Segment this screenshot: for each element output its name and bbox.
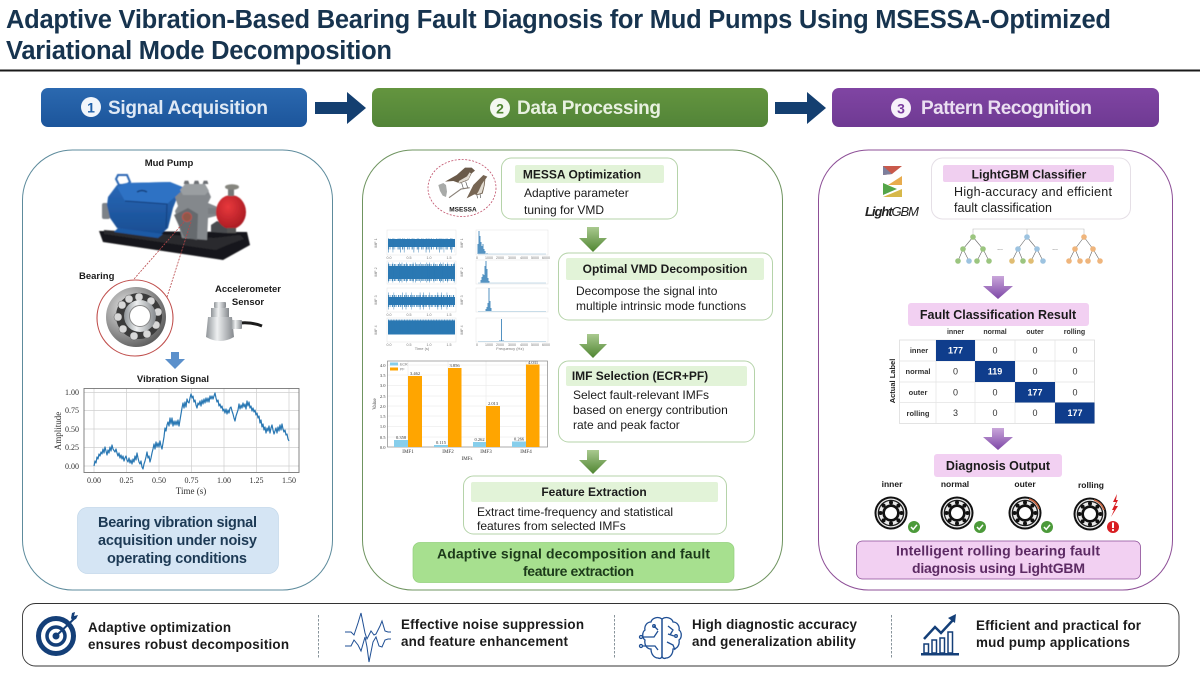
icon: accelerometer sensor <box>206 302 262 341</box>
callout: data processing summary <box>413 542 734 582</box>
chart: confusion matrix: 0 <box>992 346 998 356</box>
chart: IMF spectra: 1000 <box>485 343 493 347</box>
chart: ECR and PF bars: ECR <box>400 362 408 366</box>
header: data processing: Data Processing <box>517 98 661 119</box>
chart: IMF spectra: 5000 <box>531 256 539 260</box>
benefit: robust decomposition <box>88 620 289 652</box>
benefit: noise suppression <box>401 617 584 649</box>
chart: vibration signal: 0.50 <box>65 425 79 434</box>
chart: confusion matrix <box>888 329 1094 424</box>
arrow: to diagnosis output <box>983 428 1013 450</box>
chart: IMF spectra: 6000 <box>542 343 550 347</box>
chart: ECR and PF bars: 1.5 <box>380 414 386 419</box>
arrow: processing to recognition <box>775 92 826 124</box>
accelerometer label: Accelerometer <box>215 284 281 295</box>
chart: IMF time series: 0.0 <box>386 256 392 260</box>
benefit: diagnostic accuracy <box>692 617 858 649</box>
chart: IMF spectra: Frequency (Hz) <box>496 346 524 351</box>
chart: confusion matrix: 0 <box>1072 388 1078 398</box>
chart: vibration signal: 1.25 <box>250 476 264 485</box>
chart: ECR and PF bars: IMF2 <box>442 450 454 455</box>
card: feature extraction: Extract time-frequency and statistical <box>477 505 673 519</box>
chart: IMF time series: 1.5 <box>446 256 452 260</box>
chart: confusion matrix: outer <box>1026 329 1044 336</box>
chart: confusion matrix: 0 <box>953 366 958 376</box>
chart: confusion matrix: inner <box>947 329 964 336</box>
card: MESSA optimization: MESSA Optimization <box>523 168 641 182</box>
icon: mud pump <box>99 175 250 260</box>
chart: confusion matrix: 0 <box>953 388 958 398</box>
chart: IMF spectra: IMF 3 <box>460 295 464 305</box>
chart: ECR and PF bars: 3.0 <box>380 383 386 388</box>
arrow: to classification result <box>983 276 1013 299</box>
chart: IMF time series: 0.0 <box>386 343 392 347</box>
card: IMF selection: rate and peak factor <box>573 418 680 432</box>
header: pattern recognition <box>832 88 1159 127</box>
chart: IMF time series: 1.5 <box>446 343 452 347</box>
chart: confusion matrix: outer <box>909 388 927 397</box>
title: Variational Mode Decomposition <box>6 37 392 65</box>
benefit: diagnostic accuracy: High diagnostic accuracy <box>692 617 858 632</box>
chart: ECR and PF bars: 0.358 <box>396 435 407 440</box>
card: feature extraction: Feature Extraction <box>541 485 647 499</box>
chart: ECR and PF bars: IMF4 <box>520 450 532 455</box>
chart: ECR and PF bars: IMF1 <box>402 450 414 455</box>
chart: IMF time series: 0.0 <box>386 313 392 317</box>
chart: IMF spectra: 2000 <box>496 343 504 347</box>
chart: IMF time series: 1.5 <box>446 313 452 317</box>
card: feature extraction <box>464 476 726 534</box>
chart: vibration signal: Time (s) <box>176 486 206 496</box>
card: MESSA optimization: Adaptive parameter <box>524 186 629 200</box>
chart: confusion matrix: rolling <box>1064 329 1085 336</box>
chart: confusion matrix: normal <box>905 367 931 376</box>
chart: ECR and PF bars: 4.031 <box>528 360 538 365</box>
chart: vibration signal: 1.00 <box>217 476 231 485</box>
chart: IMF time series: 0.5 <box>406 313 412 317</box>
panel: data processing <box>362 150 782 590</box>
callout: data processing summary: Adaptive signal decomposition and fault <box>437 546 710 562</box>
callout: signal acquisition summary: acquisition under noisy <box>98 533 257 549</box>
chart: IMF time series: 0.5 <box>406 256 412 260</box>
chart: ECR and PF bars: 4.0 <box>380 363 386 368</box>
icon: inner bearing ok <box>874 479 920 533</box>
card: optimal VMD decomposition: multiple intrinsic mode functions <box>576 299 746 313</box>
header: signal acquisition: 1 <box>87 100 95 116</box>
bearing zoom lines <box>134 222 191 297</box>
chart: ECR and PF bars: Value <box>373 398 378 410</box>
chart: IMF spectra: 4000 <box>520 256 528 260</box>
chart: ECR and PF bars: PF <box>400 368 405 372</box>
accelerometer label <box>215 284 281 308</box>
benefit: noise suppression: and feature enhancement <box>401 634 569 649</box>
arrow: acquisition to processing <box>315 92 366 124</box>
card: IMF selection <box>558 361 754 442</box>
panel: pattern recognition <box>818 150 1172 590</box>
chart: vibration signal: 1.50 <box>282 476 296 485</box>
chart: vibration signal: 0.25 <box>120 476 134 485</box>
chart: confusion matrix: 177 <box>1067 408 1083 418</box>
card: optimal VMD decomposition: Optimal VMD Decomposition <box>583 262 747 276</box>
chart: IMF spectra: IMF 4 <box>460 325 464 335</box>
callout: data processing summary: feature extraction <box>523 563 634 579</box>
chart: ECR and PF bars: 0.0 <box>380 445 386 450</box>
chart: IMF spectra: 4000 <box>520 343 528 347</box>
benefit: robust decomposition: ensures robust decomposition <box>88 637 289 652</box>
callout: signal acquisition summary <box>78 508 278 574</box>
accelerometer label: Sensor <box>232 297 264 308</box>
chart: confusion matrix: 0 <box>1032 366 1038 376</box>
header: signal acquisition <box>41 88 307 127</box>
chart: ECR and PF bars: 3.856 <box>449 363 460 368</box>
label: diagnosis output <box>934 454 1062 477</box>
chart: confusion matrix: inner <box>910 346 928 355</box>
bearing label: Bearing <box>79 271 115 282</box>
chart: confusion matrix: 177 <box>948 346 963 356</box>
chart: IMF time series: IMF 3 <box>374 295 378 305</box>
chart: IMF spectra: 2000 <box>496 256 504 260</box>
card: LightGBM classifier: High-accuracy and efficient <box>954 185 1113 199</box>
chart: vibration signal <box>53 388 299 496</box>
chart: vibration signal: 0.00 <box>65 462 79 471</box>
icon: inner bearing ok: inner <box>882 479 903 489</box>
benefit: diagnostic accuracy: and generalization ability <box>692 634 857 649</box>
chart: IMF spectra: 6000 <box>542 256 550 260</box>
chart: vibration signal: 1.00 <box>65 388 79 397</box>
chart: IMF time series <box>374 230 456 351</box>
callout: signal acquisition summary: operating conditions <box>107 551 247 567</box>
panel: key benefits <box>22 604 1179 666</box>
card: MESSA optimization <box>502 158 678 219</box>
chart: vibration signal: 0.00 <box>87 476 101 485</box>
icon: growth chart <box>921 614 959 656</box>
label: fault classification result <box>908 303 1089 326</box>
arrow: to VMD <box>579 227 607 252</box>
icon: MSESSA birds: MSESSA <box>449 206 477 214</box>
chart: confusion matrix: 119 <box>988 366 1002 376</box>
icon: MSESSA birds <box>428 160 496 216</box>
header: data processing <box>372 88 768 127</box>
chart: confusion matrix: 0 <box>1032 408 1038 418</box>
chart: IMF time series: 1.0 <box>426 313 432 317</box>
arrow: to IMF selection <box>579 334 607 358</box>
icon: bearing <box>97 280 173 356</box>
chart: IMF time series: Time (s) <box>415 346 430 351</box>
callout: signal acquisition summary: Bearing vibration signal <box>98 515 257 531</box>
title <box>6 6 1111 65</box>
mud pump label: Mud Pump <box>145 158 193 169</box>
chart: IMF spectra: 0 <box>476 343 478 347</box>
card: IMF selection: IMF Selection (ECR+PF) <box>572 369 708 383</box>
title: Adaptive Vibration-Based Bearing Fault Diagnosis for Mud Pumps Using MSESSA-Optimized <box>6 6 1111 34</box>
label: diagnosis output: Diagnosis Output <box>946 459 1051 473</box>
icon: target <box>38 612 78 654</box>
chart: IMF spectra: 0 <box>476 256 478 260</box>
card: MESSA optimization: tuning for VMD <box>524 203 604 217</box>
chart: vibration signal: 0.75 <box>184 476 198 485</box>
callout: pattern recognition summary <box>856 541 1140 579</box>
chart: ECR and PF bars: 3.462 <box>410 371 420 376</box>
chart: IMF time series: 0.5 <box>406 343 412 347</box>
icon: gradient boosting trees: ... <box>997 245 1003 252</box>
header: pattern recognition: 3 <box>897 100 905 116</box>
chart: confusion matrix: normal <box>983 329 1007 336</box>
benefit: robust decomposition: Adaptive optimization <box>88 620 231 635</box>
icon: gradient boosting trees <box>955 229 1103 264</box>
chart: confusion matrix: 0 <box>992 408 998 418</box>
chart: confusion matrix: 0 <box>1072 366 1078 376</box>
icon: noise waveform <box>345 613 391 662</box>
chart: ECR and PF bars: IMFs <box>462 457 472 462</box>
chart: IMF spectra: 3000 <box>508 256 516 260</box>
chart: IMF spectra: IMF 2 <box>460 267 464 277</box>
chart: confusion matrix: 0 <box>992 388 998 398</box>
chart: ECR and PF bars: 0.5 <box>380 435 386 440</box>
card: LightGBM classifier: LightGBM Classifier <box>972 168 1087 182</box>
callout: pattern recognition summary: diagnosis using LightGBM <box>912 560 1085 576</box>
chart: ECR and PF bars: IMF3 <box>480 450 492 455</box>
icon: outer bearing ok: outer <box>1014 479 1036 489</box>
arrow: bearing to signal <box>165 352 185 369</box>
icon: outer bearing ok <box>1008 479 1053 533</box>
icon: rolling bearing fault <box>1074 480 1119 533</box>
header: pattern recognition: Pattern Recognition <box>921 98 1092 119</box>
chart: IMF spectra: IMF 1 <box>460 238 464 248</box>
chart: IMF time series: IMF 4 <box>374 325 378 335</box>
card: IMF selection: based on energy contribution <box>573 403 728 417</box>
card: IMF selection: Select fault-relevant IMFs <box>573 388 709 402</box>
chart: IMF spectra: 5000 <box>531 343 539 347</box>
chart: confusion matrix: 0 <box>1072 346 1078 356</box>
chart: ECR and PF bars: 2.5 <box>380 394 386 399</box>
chart: IMF spectra: 3000 <box>508 343 516 347</box>
chart: vibration signal: Amplitude <box>53 412 63 450</box>
chart: vibration signal: 0.75 <box>65 406 79 415</box>
icon: LightGBM logo: LightGBM <box>865 204 919 219</box>
chart: IMF time series: 1.0 <box>426 256 432 260</box>
chart: confusion matrix: rolling <box>907 409 930 418</box>
panel: signal acquisition <box>22 150 332 590</box>
icon: gradient boosting trees: ... <box>1052 245 1058 252</box>
chart: confusion matrix: 0 <box>1032 346 1038 356</box>
benefit: practical application: Efficient and practical for <box>976 618 1142 633</box>
chart: ECR and PF bars <box>373 360 548 462</box>
chart: ECR and PF bars: 2.0 <box>380 404 386 409</box>
chart: IMF time series: IMF 1 <box>374 238 378 248</box>
vibration signal label: Vibration Signal <box>137 374 209 385</box>
chart: IMF spectra <box>460 230 550 351</box>
chart: ECR and PF bars: 1.0 <box>380 424 386 429</box>
header: signal acquisition: Signal Acquisition <box>108 98 268 119</box>
chart: ECR and PF bars: 0.262 <box>474 437 485 442</box>
chart: IMF time series: IMF 2 <box>374 267 378 277</box>
card: LightGBM classifier: fault classification <box>954 201 1052 215</box>
arrow: to feature extraction <box>579 450 607 474</box>
chart: ECR and PF bars: 0.266 <box>514 436 525 442</box>
chart: confusion matrix: Actual Label <box>888 359 897 403</box>
chart: confusion matrix: 3 <box>953 408 958 418</box>
label: fault classification result: Fault Classification Result <box>920 308 1077 322</box>
card: feature extraction: features from selected IMFs <box>477 519 626 533</box>
chart: vibration signal: 0.25 <box>65 443 79 452</box>
icon: LightGBM logo <box>865 166 919 219</box>
chart: IMF time series: 1.0 <box>426 343 432 347</box>
icon: brain circuit <box>640 618 681 658</box>
chart: ECR and PF bars: 0.115 <box>436 440 447 445</box>
icon: normal bearing ok <box>940 479 986 533</box>
header: data processing: 2 <box>496 100 504 116</box>
chart: ECR and PF bars: 2.013 <box>488 401 499 406</box>
chart: confusion matrix: 177 <box>1027 388 1043 398</box>
card: optimal VMD decomposition: Decompose the signal into <box>576 284 718 298</box>
callout: pattern recognition summary: Intelligent rolling bearing fault <box>896 542 1100 558</box>
chart: ECR and PF bars: 3.5 <box>380 373 386 378</box>
chart: IMF spectra: 1000 <box>485 256 493 260</box>
chart: vibration signal: 0.50 <box>152 476 166 485</box>
icon: normal bearing ok: normal <box>941 479 969 489</box>
benefit: practical application <box>976 618 1142 650</box>
icon: rolling bearing fault: rolling <box>1078 480 1104 490</box>
benefit: noise suppression: Effective noise suppression <box>401 617 584 632</box>
benefit: practical application: mud pump applications <box>976 635 1130 650</box>
card: LightGBM classifier <box>932 158 1130 219</box>
card: optimal VMD decomposition <box>558 253 772 320</box>
